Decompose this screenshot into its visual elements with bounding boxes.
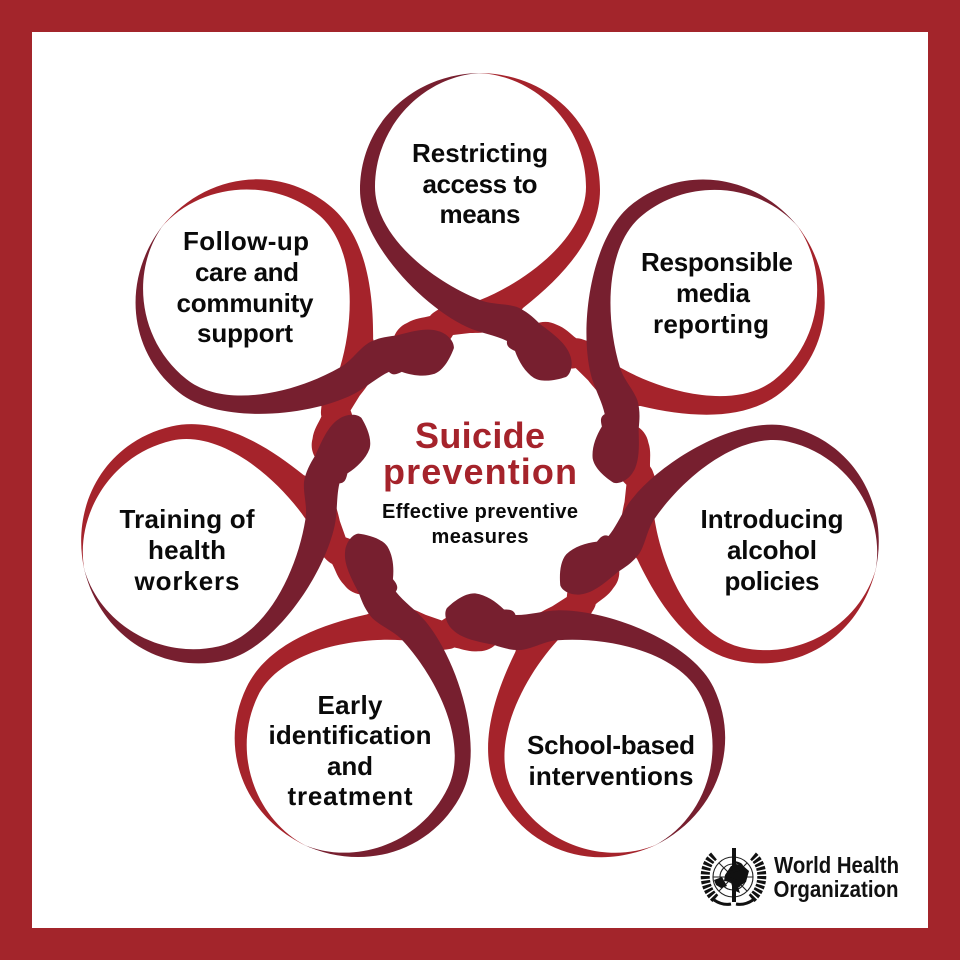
label: School-based interventions: interventions	[528, 761, 694, 791]
label: Restricting access to means	[412, 138, 548, 229]
label: Early identification and treatment	[268, 690, 432, 811]
label: Training of health workers: health	[148, 535, 226, 565]
title: Suicide prevention	[383, 415, 577, 492]
label: Follow-up care and community support: care and	[195, 257, 299, 287]
title: Suicide prevention: Suicide	[415, 415, 545, 456]
label: Introducing alcohol policies: policies	[724, 566, 820, 596]
label: Early identification and treatment: and	[327, 751, 373, 781]
label: Early identification and treatment: Early	[318, 690, 383, 720]
logo: World Health Organization	[705, 848, 899, 904]
text: World Health Organization wordmark: Organization	[774, 876, 898, 902]
label: Early identification and treatment: identification	[268, 720, 432, 750]
subtitle: Effective preventive measures: measures	[432, 526, 528, 548]
label: Training of health workers: Training of	[120, 504, 255, 534]
text: World Health Organization wordmark	[774, 852, 899, 902]
label: Restricting access to means: access to	[422, 169, 538, 199]
label: Early identification and treatment: treatment	[288, 781, 413, 811]
subtitle: Effective preventive measures	[382, 501, 578, 548]
ring: dark ribbons ending in clasped hands	[64, 73, 903, 897]
ring: light red ribbons of all seven loops	[57, 73, 895, 897]
label: School-based interventions	[527, 730, 695, 791]
label: Introducing alcohol policies	[700, 504, 844, 596]
label: Follow-up care and community support: support	[197, 318, 293, 348]
label: Training of health workers: workers	[134, 566, 240, 596]
label: School-based interventions: School-based	[527, 730, 695, 760]
label: Introducing alcohol policies: Introducing	[700, 504, 844, 534]
label: Responsible media reporting: media	[676, 278, 751, 308]
subtitle: Effective preventive measures: Effective preventive	[382, 501, 578, 523]
label: Training of health workers	[120, 504, 255, 596]
label: Responsible media reporting: Responsible	[641, 247, 793, 277]
icon: WHO emblem	[705, 848, 762, 904]
label: Introducing alcohol policies: alcohol	[727, 535, 817, 565]
label: Responsible media reporting	[641, 247, 793, 339]
title: Suicide prevention: prevention	[383, 451, 577, 492]
label: Follow-up care and community support	[176, 226, 314, 348]
text: World Health Organization wordmark: World Health	[774, 852, 899, 878]
label: Responsible media reporting: reporting	[653, 309, 769, 339]
label: Restricting access to means: means	[440, 199, 520, 229]
label: Restricting access to means: Restricting	[412, 138, 548, 168]
label: Follow-up care and community support: community	[176, 288, 314, 318]
label: Follow-up care and community support: Follow-up	[183, 226, 309, 256]
